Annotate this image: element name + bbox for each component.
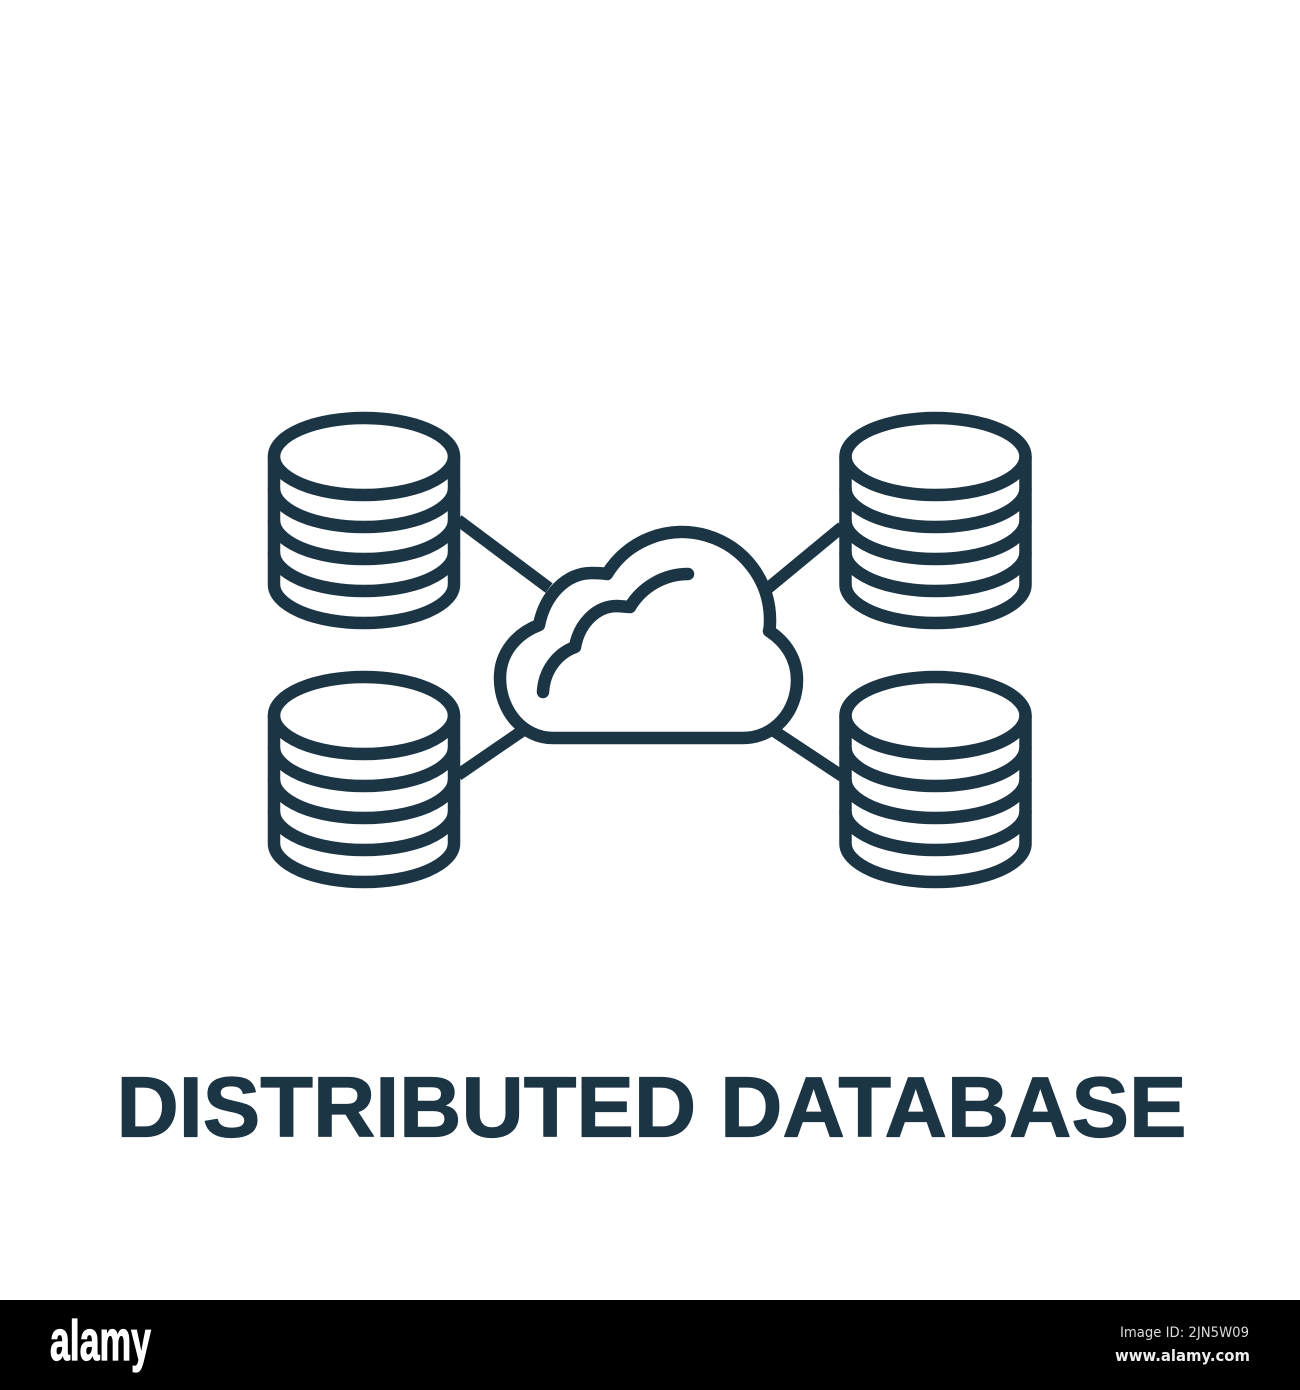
icon: bottom-left database bbox=[274, 677, 454, 882]
connector: top-left database to cloud bbox=[458, 520, 549, 588]
icon: top-left database bbox=[274, 418, 454, 623]
footer bar bbox=[0, 1300, 1300, 1390]
connector: bottom-right database to cloud bbox=[771, 729, 842, 776]
title: DISTRIBUTED DATABASE bbox=[116, 1060, 1187, 1156]
footer logo: alamy: alamy bbox=[50, 1309, 151, 1373]
cloud inner highlight bbox=[543, 574, 688, 692]
icon: cloud bbox=[500, 532, 797, 738]
connector: bottom-left database to cloud bbox=[458, 729, 525, 775]
icon: bottom-right database bbox=[846, 677, 1026, 882]
footer url: www.alamy.com bbox=[1115, 1346, 1250, 1365]
icon: top-right database bbox=[846, 418, 1026, 623]
footer image id: Image ID: 2JN5W09 bbox=[1120, 1325, 1249, 1341]
connector: top-right database to cloud bbox=[767, 527, 842, 589]
